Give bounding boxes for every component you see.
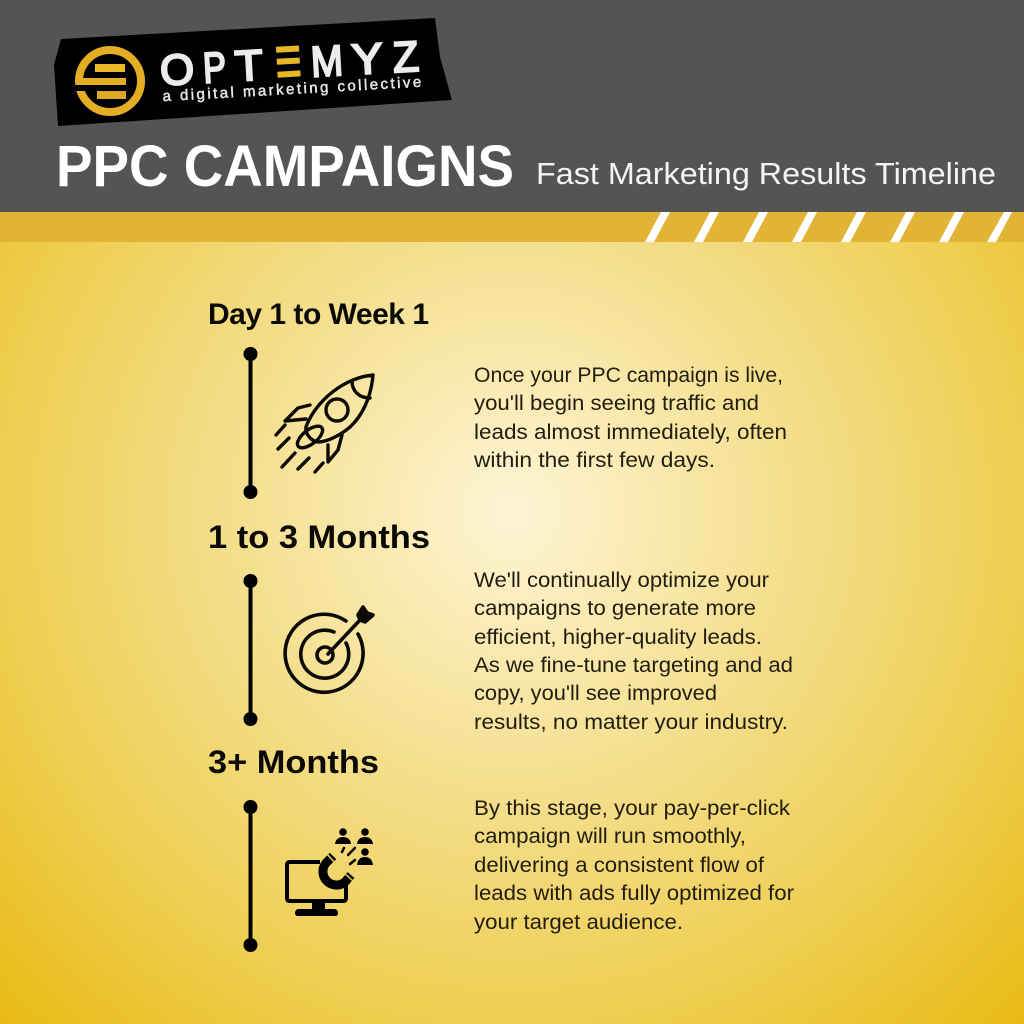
step 3 text: By this stage, your pay-per-click — [474, 797, 791, 820]
step 1 heading: Day 1 to Week 1 — [208, 298, 429, 331]
step 3 text: leads with ads fully optimized for — [474, 882, 794, 905]
step 2 text: efficient, higher-quality leads. — [474, 626, 762, 649]
step 3 text: your target audience. — [474, 911, 683, 934]
title: PPC CAMPAIGNS — [56, 134, 514, 199]
step 3 heading: 3+ Months — [208, 744, 379, 780]
icon: target with arrow — [285, 607, 373, 692]
icon: monitor with magnet attracting people — [287, 828, 373, 916]
logo wordmark: a digital marketing collective — [162, 74, 422, 105]
header band — [0, 0, 1024, 212]
logo wordmark: T — [234, 42, 264, 91]
subtitle: Fast Marketing Results Timeline — [536, 156, 996, 191]
step 1 text: within the first few days. — [473, 449, 715, 472]
logo icon — [72, 50, 141, 112]
step 2 heading: 1 to 3 Months — [208, 519, 430, 555]
step 2 text: copy, you'll see improved — [474, 682, 717, 705]
step 1 timeline — [244, 347, 258, 499]
step 3 text: campaign will run smoothly, — [474, 825, 746, 848]
logo wordmark: Z — [391, 33, 420, 82]
logo wordmark: Y — [351, 35, 384, 85]
step 2 timeline — [244, 574, 258, 726]
step 1 text: you'll begin seeing traffic and — [474, 392, 759, 415]
step 2 text — [474, 569, 793, 734]
logo wordmark — [159, 33, 422, 105]
logo on black tape — [54, 18, 452, 126]
step 3 timeline — [244, 800, 258, 952]
accent strip with diagonal stripes — [0, 212, 1024, 242]
step 3 text — [474, 797, 794, 934]
step 1 text: leads almost immediately, often — [474, 421, 787, 444]
step 2 text: campaigns to generate more — [474, 597, 756, 620]
icon: rocket — [276, 375, 373, 472]
step 1 text — [473, 364, 787, 472]
logo wordmark: O — [159, 45, 195, 95]
step 2 text: results, no matter your industry. — [474, 711, 788, 734]
step 1 text: Once your PPC campaign is live, — [474, 364, 783, 387]
step 2 text: As we fine-tune targeting and ad — [474, 654, 793, 677]
step 3 text: delivering a consistent flow of — [474, 854, 764, 877]
logo wordmark: P — [202, 44, 227, 93]
logo wordmark: M — [310, 37, 344, 87]
step 2 text: We'll continually optimize your — [474, 569, 769, 592]
